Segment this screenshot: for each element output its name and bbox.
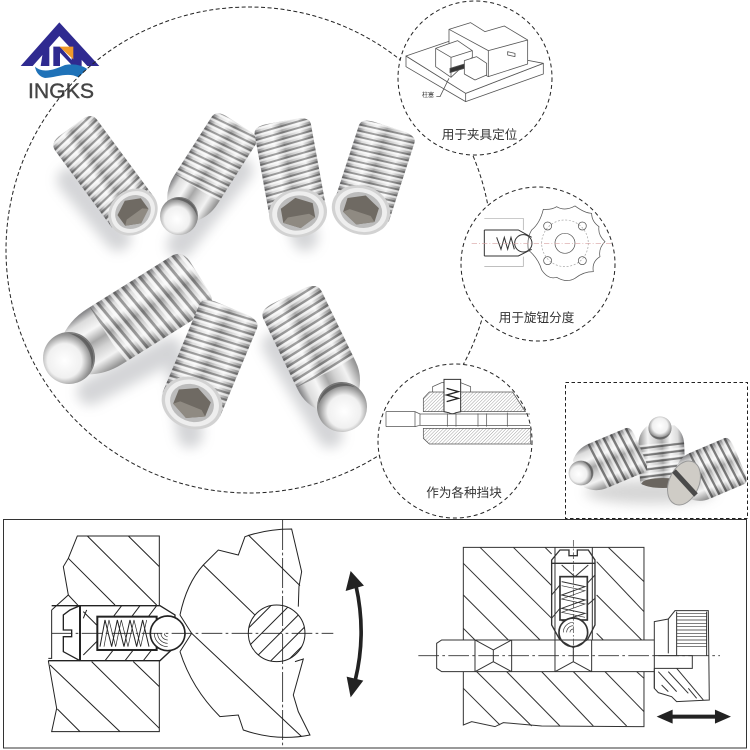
line drawing: fixture [406,23,543,102]
callout: stop block [378,364,532,518]
dashed frame [566,382,748,518]
callout: fixture positioning [398,1,552,155]
drawing: ball plunger with rotating wheel [48,520,364,748]
caption: 用于夹具定位 [442,128,518,142]
panel: product photo of ball plungers [33,110,417,440]
circle outline [378,364,532,518]
line drawing: indexing knob [472,206,612,281]
panel border [4,520,746,748]
logo: INGKS [21,22,99,103]
big dashed circle [6,7,492,493]
icon: curved double arrow [346,571,364,697]
icon: wave [35,64,87,78]
screw: hex socket third [253,116,331,242]
logo wordmark: INGKS [28,80,94,103]
shadows under screws [70,170,330,435]
screw: hex socket lower centre [154,296,260,438]
small label: 柱塞 [422,91,434,99]
icon: horizontal double arrow [657,710,731,724]
icon: IN letters [41,46,82,66]
panel: technical drawings [4,520,746,748]
screw: hex socket upper left [50,112,167,245]
circle outline [398,1,552,155]
screw: ball nose upper [153,110,260,242]
icon: orange triangle [59,47,73,59]
panel: small product photo [565,382,749,518]
screw: left ball nose [565,426,650,496]
screw: ball nose lower right [259,282,375,440]
screw: large ball nose lying left [33,249,217,394]
caption: 用于旋钮分度 [499,310,575,325]
photo shadow [585,480,715,504]
screw: slotted end [661,436,749,510]
screw: upright ball nose [638,416,686,488]
screw: hex socket fourth [325,118,417,242]
caption: 作为各种挡块 [426,485,502,500]
icon: roof [21,22,99,66]
callout: knob indexing [461,187,615,341]
line drawing: stop block [386,379,531,444]
drawing: ball plunger with sliding pin [418,540,731,727]
circle outline [461,187,615,341]
